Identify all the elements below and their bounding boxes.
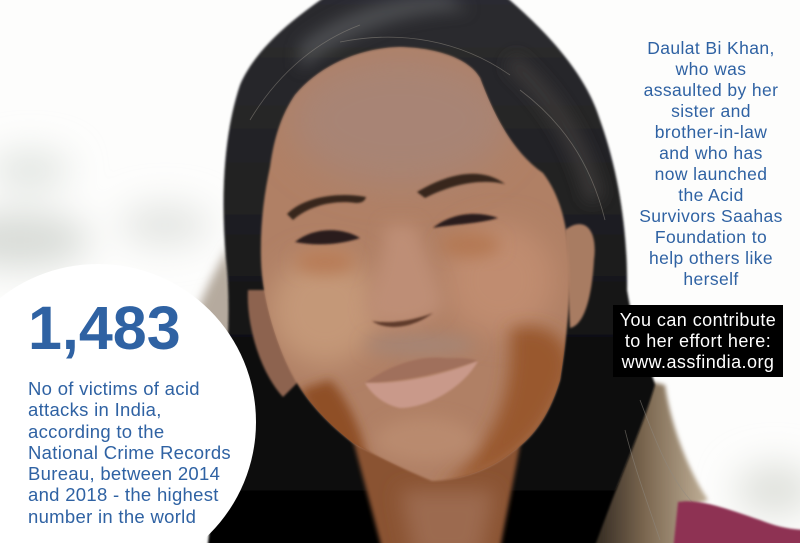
nose [365,225,443,325]
caption: assaulted by her [644,80,778,100]
caption: sister and [671,101,751,121]
caption: now launched [655,164,767,184]
ears [248,290,300,397]
hair [205,0,655,543]
clothing [672,501,800,543]
caption [639,38,783,289]
statistic description: No of victims of acid [28,378,200,399]
statistic description: attacks in India, [28,399,162,420]
callout: contribute: You can contribute [620,310,776,330]
statistic description [28,378,231,527]
caption: Daulat Bi Khan, [647,38,775,58]
statistic description: and 2018 - the highest [28,484,219,505]
eyes [295,230,360,244]
big number: 1,483 [28,294,181,362]
statistic description: number in the world [28,506,196,527]
callout: contribute: to her effort here: [625,331,771,351]
caption: Foundation to [655,227,767,247]
wispy hair left [192,245,250,400]
face [261,47,570,490]
blond hair ends right [570,375,708,543]
statistic description: Bureau, between 2014 [28,463,220,484]
neck [353,440,520,543]
caption: Survivors Saahas [639,206,783,226]
statistic description: National Crime Records [28,442,231,463]
caption: the Acid [678,185,744,205]
caption: herself [683,269,739,289]
statistic description: according to the [28,421,164,442]
callout: contribute [613,305,783,377]
caption: help others like [649,248,773,268]
caption: who was [676,59,746,79]
caption: brother-in-law [655,122,767,142]
callout: contribute: www.assfindia.org [622,352,774,372]
eyebrows [287,195,366,220]
hair strands [250,25,695,540]
mouth [365,357,478,383]
caption: and who has [659,143,763,163]
circle panel: statistic [0,264,256,543]
